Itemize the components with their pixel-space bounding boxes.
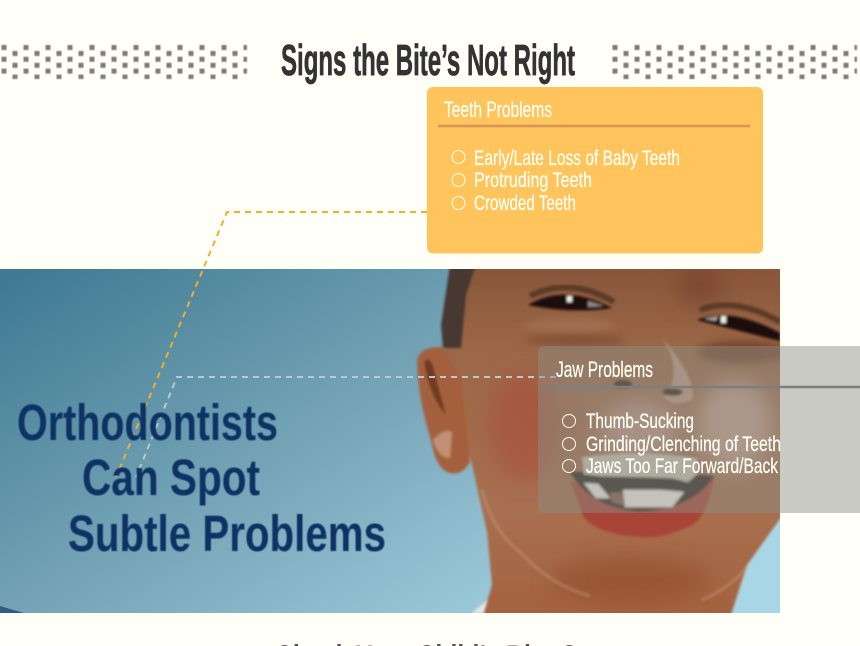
highlights along the jaw [482, 490, 590, 596]
list: jaw problems: Thumb-Sucking [586, 409, 694, 433]
list: teeth problems: Crowded Teeth [474, 191, 576, 215]
decorative dot band: right [612, 45, 857, 79]
panel: teeth problems [427, 87, 763, 254]
dashed connector: jaw problems [136, 377, 556, 477]
panel heading: jaw problems: Jaw Problems [556, 357, 653, 382]
list: jaw problems: Jaws Too Far Forward/Back [586, 454, 778, 478]
left eye [528, 287, 614, 310]
panel: jaw problems [538, 346, 860, 513]
list: jaw problems: Grinding/Clenching of Teeth [586, 432, 781, 456]
mouth and teeth [570, 454, 714, 538]
list: teeth problems: Early/Late Loss of Baby Teeth [474, 146, 680, 170]
photo headline: Orthodontists [17, 394, 278, 451]
nose [614, 338, 693, 404]
dashed connector: teeth problems [116, 212, 427, 477]
right eye [697, 305, 780, 341]
list: teeth problems [452, 146, 680, 215]
hair [441, 265, 476, 348]
photo headline: Subtle Problems [68, 505, 386, 562]
list: teeth problems: Protruding Teeth [474, 168, 592, 192]
panel heading: teeth problems: Teeth Problems [444, 97, 552, 122]
photo headline [17, 394, 386, 562]
photo headline: Can Spot [82, 449, 260, 506]
list: jaw problems [562, 409, 781, 478]
title: Signs the Bite’s Not Right [281, 36, 575, 85]
photo: smiling boy on blue background [0, 265, 787, 618]
decorative dot band: left [0, 45, 247, 79]
